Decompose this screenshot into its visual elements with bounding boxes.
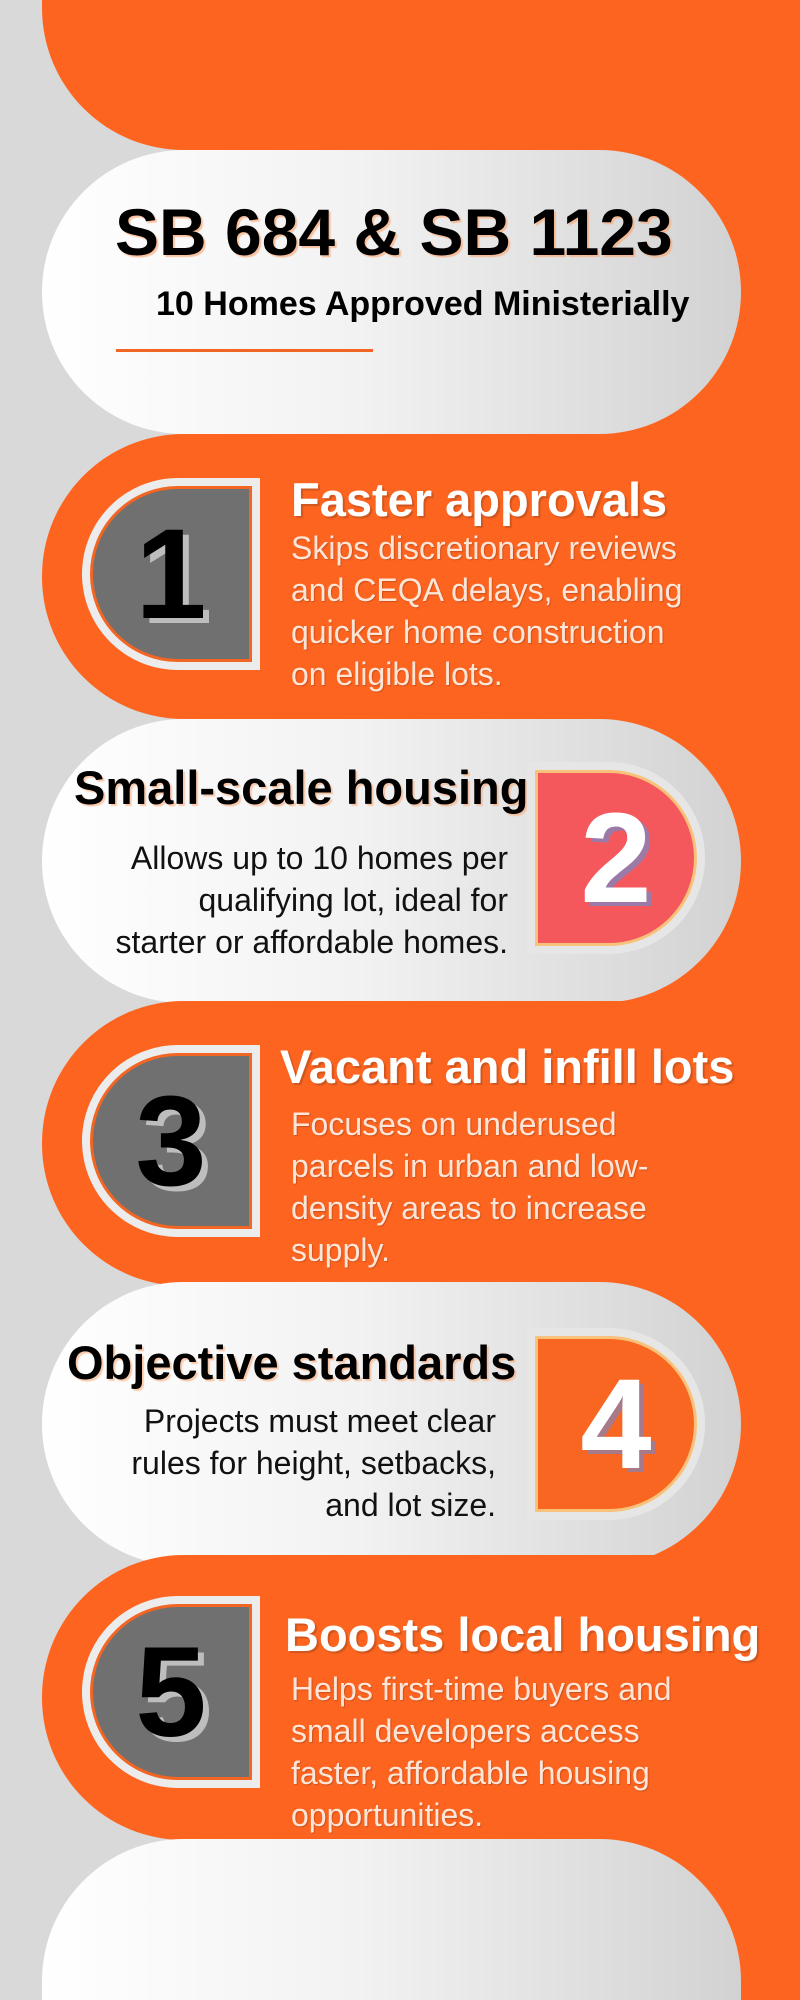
panel: item 3 — [42, 1001, 800, 1286]
text: Allows up to 10 homes per — [131, 840, 508, 876]
panel: item 5 — [42, 1555, 800, 1840]
text: qualifying lot, ideal for — [198, 882, 508, 918]
text: and CEQA delays, enabling — [291, 572, 682, 608]
panel: header — [42, 150, 741, 434]
text: supply. — [291, 1232, 390, 1268]
text: Skips discretionary reviews — [291, 530, 677, 566]
icon: number 1 — [82, 478, 260, 670]
icon: number 3 — [82, 1045, 260, 1237]
text: faster, affordable housing — [291, 1755, 650, 1791]
text — [291, 1671, 672, 1834]
heading: Small-scale housing — [74, 761, 528, 814]
text: Helps first-time buyers and — [291, 1671, 672, 1707]
text — [116, 840, 508, 960]
panel: item 1 — [42, 434, 800, 719]
heading: Vacant and infill lots — [280, 1040, 734, 1093]
text: on eligible lots. — [291, 656, 503, 692]
title: SB 684 & SB 1123 — [115, 195, 673, 269]
panel: item 2 — [42, 719, 741, 1003]
panel: bottom blank — [42, 1839, 741, 2000]
panel: item 4 — [42, 1282, 741, 1566]
heading: Faster approvals — [291, 473, 667, 526]
text: small developers access — [291, 1713, 640, 1749]
icon: number 2 — [527, 762, 705, 954]
text: Focuses on underused — [291, 1106, 617, 1142]
text — [291, 1106, 649, 1269]
underline — [116, 349, 373, 352]
heading: Boosts local housing — [285, 1608, 760, 1661]
icon: number 5 — [82, 1596, 260, 1788]
text: rules for height, setbacks, — [131, 1445, 496, 1481]
text: quicker home construction — [291, 614, 665, 650]
icon: number 4: 4 — [580, 1352, 652, 1496]
icon: number 1: 1 — [135, 502, 207, 646]
icon: number 2: 2 — [580, 786, 652, 930]
text — [291, 530, 682, 693]
icon: number 5: 5 — [135, 1620, 207, 1764]
icon: number 3: 3 — [135, 1070, 207, 1212]
text: opportunities. — [291, 1797, 483, 1833]
text: starter or affordable homes. — [116, 924, 508, 960]
text: parcels in urban and low- — [291, 1148, 649, 1184]
subtitle: 10 Homes Approved Ministerially — [156, 285, 689, 323]
text: density areas to increase — [291, 1190, 647, 1226]
heading: Objective standards — [67, 1336, 516, 1389]
text: and lot size. — [325, 1487, 496, 1523]
icon: number 4 — [527, 1328, 705, 1520]
top orange band — [42, 0, 800, 150]
text — [131, 1403, 496, 1523]
text: Projects must meet clear — [144, 1403, 496, 1439]
